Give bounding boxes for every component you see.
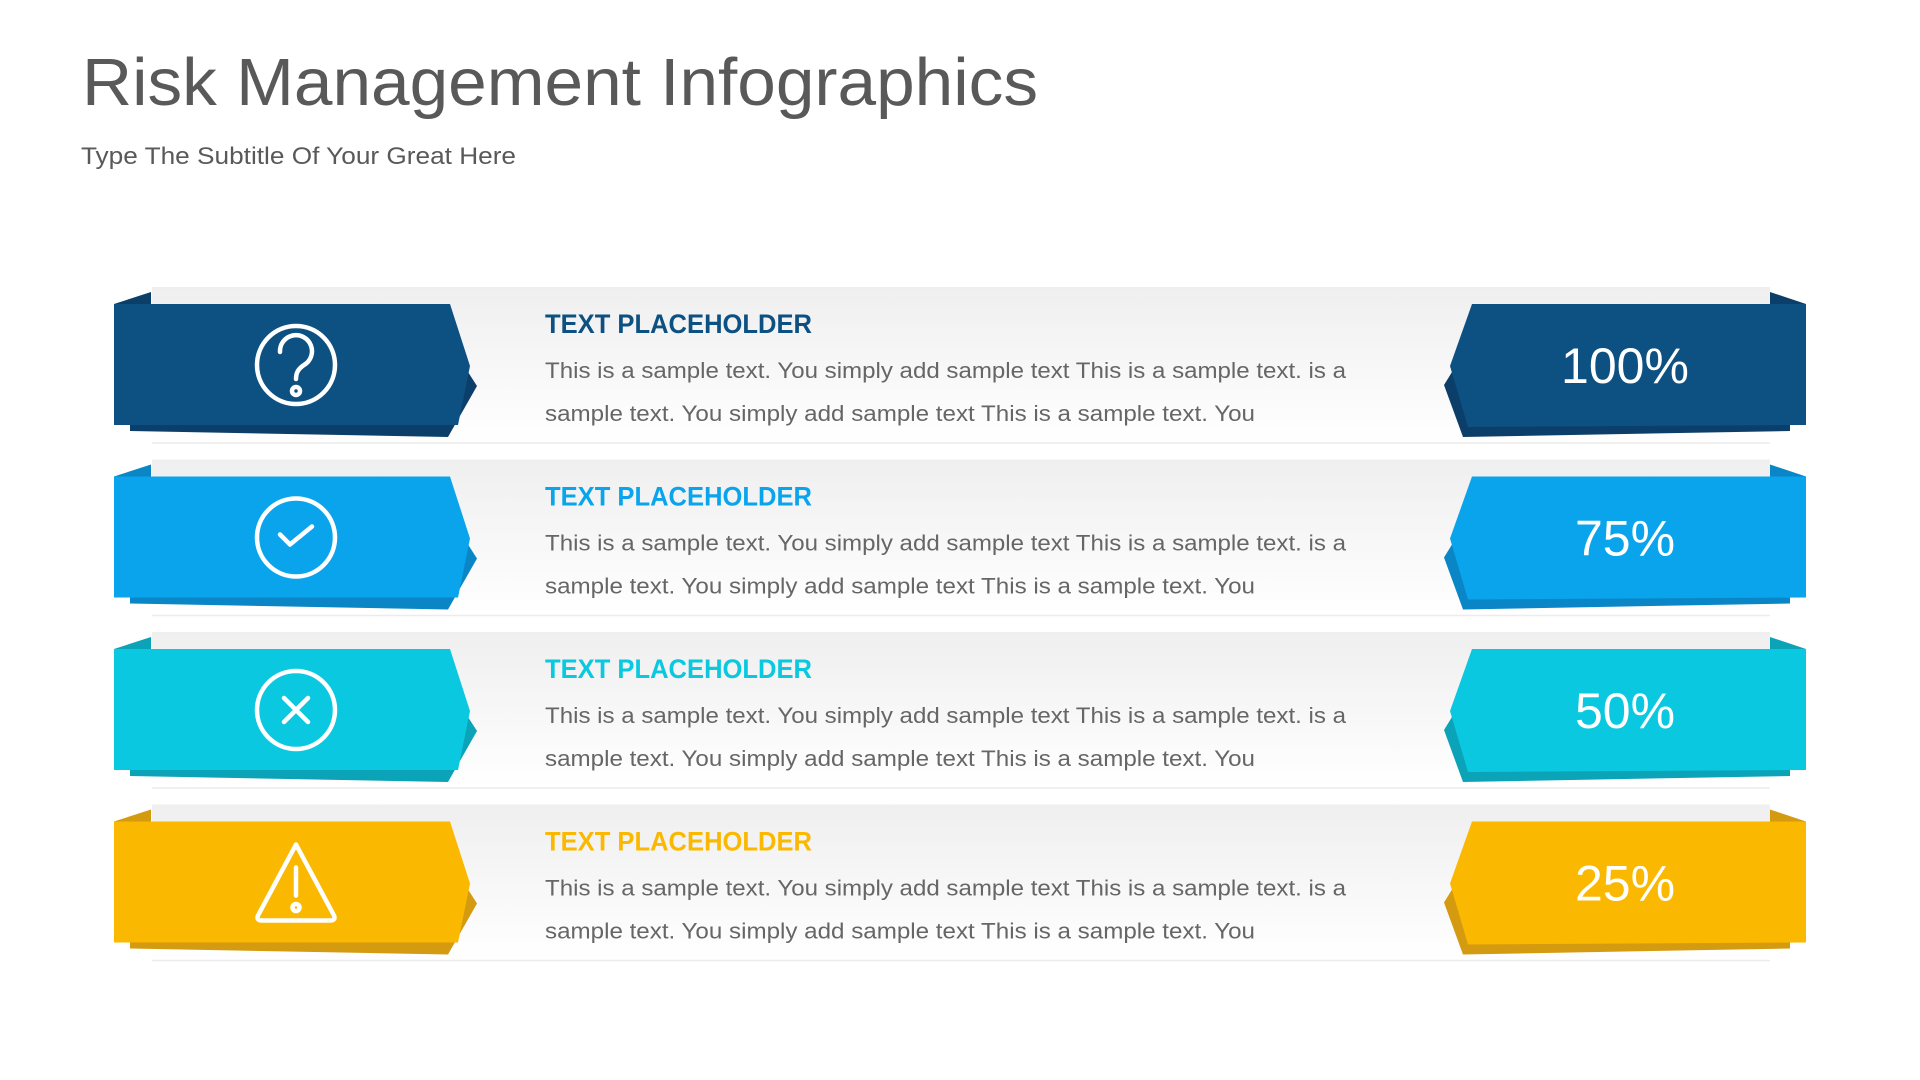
right tab [1444,464,1806,610]
left tab [114,292,477,437]
right tab [1444,292,1806,437]
row 4: 25% [114,804,1806,960]
icon: warning [258,844,334,920]
body text: This is a sample text. You simply add sample text This is a sample text. is a [545,530,1347,556]
body text: sample text. You simply add sample text This is a sample text. You [545,746,1255,771]
body text: sample text. You simply add sample text This is a sample text. You [545,918,1255,944]
heading: TEXT PLACEHOLDER [545,482,812,512]
value: 25% [1575,856,1675,912]
heading: TEXT PLACEHOLDER [545,654,812,684]
heading: TEXT PLACEHOLDER [545,826,812,856]
row 3: 50% [114,632,1806,788]
body text: This is a sample text. You simply add sample text This is a sample text. is a [545,876,1347,900]
body text: sample text. You simply add sample text This is a sample text. You [545,574,1255,598]
icon: cross [257,671,335,749]
body text [545,530,1347,598]
row 1: 100% [114,287,1806,443]
body text: sample text. You simply add sample text This is a sample text. You [545,401,1255,426]
title: Risk Management Infographics [82,45,1038,120]
body text: This is a sample text. You simply add sample text This is a sample text. is a [545,358,1347,383]
icon: check [257,498,335,576]
row 2: 75% [114,460,1806,616]
body text: This is a sample text. You simply add sample text This is a sample text. is a [545,703,1347,728]
body text [545,703,1347,771]
body text [545,876,1347,944]
value: 75% [1575,510,1675,566]
value: 100% [1561,338,1689,394]
left tab [114,810,477,954]
body text [545,358,1347,426]
left tab [114,464,477,610]
left tab [114,637,477,782]
heading: TEXT PLACEHOLDER [545,309,812,339]
right tab [1444,637,1806,782]
value: 50% [1575,683,1675,739]
right tab [1444,810,1806,954]
subtitle: Type The Subtitle Of Your Great Here [81,143,516,170]
icon: question [257,326,335,404]
